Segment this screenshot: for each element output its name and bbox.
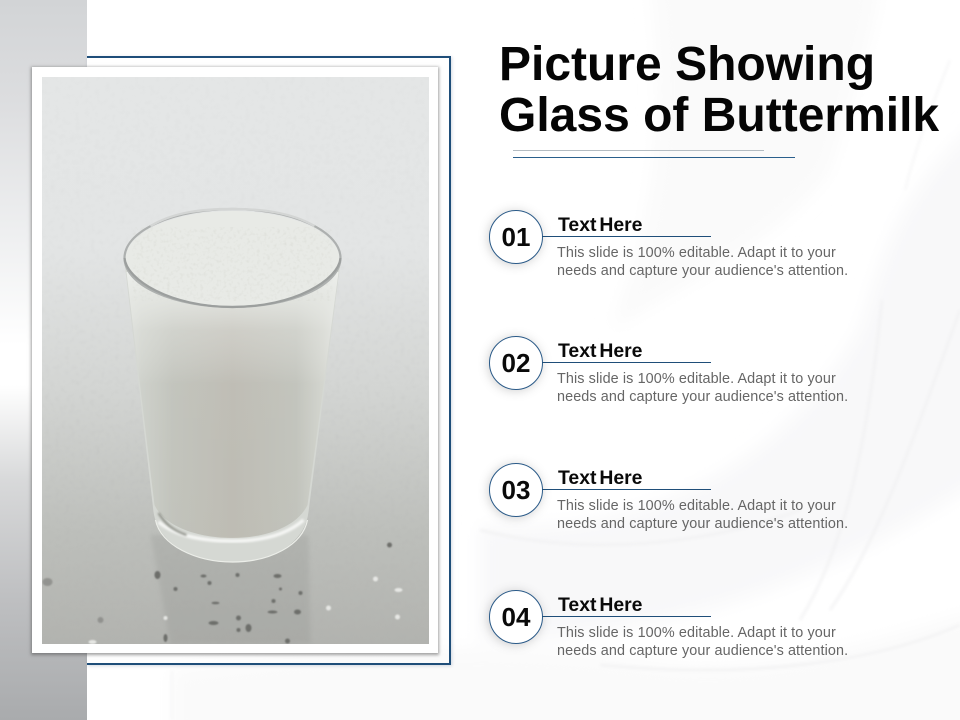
rule 03 (542, 489, 711, 490)
description 01: This slide is 100% editable. Adapt it to your (557, 245, 836, 261)
heading 03: Text Here (558, 467, 642, 489)
photo card (32, 67, 438, 653)
heading 01: Text Here (558, 214, 642, 236)
item 03 (484, 460, 848, 532)
title underline grey (513, 150, 764, 151)
number badge 02: 02 (502, 348, 530, 378)
rule 01 (542, 236, 711, 237)
milk foam and rim (124, 209, 340, 307)
description 02: This slide is 100% editable. Adapt it to your (557, 371, 836, 387)
title (499, 38, 940, 142)
item 02 (484, 333, 848, 405)
item 01 (484, 207, 848, 279)
glass body (124, 262, 340, 562)
number badge 01: 01 (502, 222, 530, 252)
description 04 (557, 625, 848, 659)
blue outline frame (87, 56, 451, 665)
title: Picture Showing (499, 38, 875, 91)
item 04 (484, 587, 848, 659)
number badge 01 (489, 210, 543, 264)
description 02 (557, 371, 848, 405)
rule 04 (542, 616, 711, 617)
title underline blue (513, 157, 795, 158)
heading 02: Text Here (558, 340, 642, 362)
number badge 04 (489, 590, 543, 644)
description 03: needs and capture your audience's attention. (557, 516, 848, 532)
rule 02 (542, 362, 711, 363)
number badge 02 (489, 336, 543, 390)
title: Glass of Buttermilk (499, 89, 939, 142)
table surface (41, 77, 429, 644)
number badge 04: 04 (502, 602, 530, 632)
number badge 03 (489, 463, 543, 517)
photo: glass of buttermilk (42, 77, 429, 644)
left grey gradient band (0, 0, 87, 720)
description 01 (557, 245, 848, 279)
description 02: needs and capture your audience's attention. (557, 389, 848, 405)
description 04: needs and capture your audience's attention. (557, 643, 848, 659)
heading 04: Text Here (558, 594, 642, 616)
description 01: needs and capture your audience's attention. (557, 263, 848, 279)
description 04: This slide is 100% editable. Adapt it to your (557, 625, 836, 641)
number badge 03: 03 (502, 475, 530, 505)
description 03 (557, 498, 848, 532)
description 03: This slide is 100% editable. Adapt it to your (557, 498, 836, 514)
